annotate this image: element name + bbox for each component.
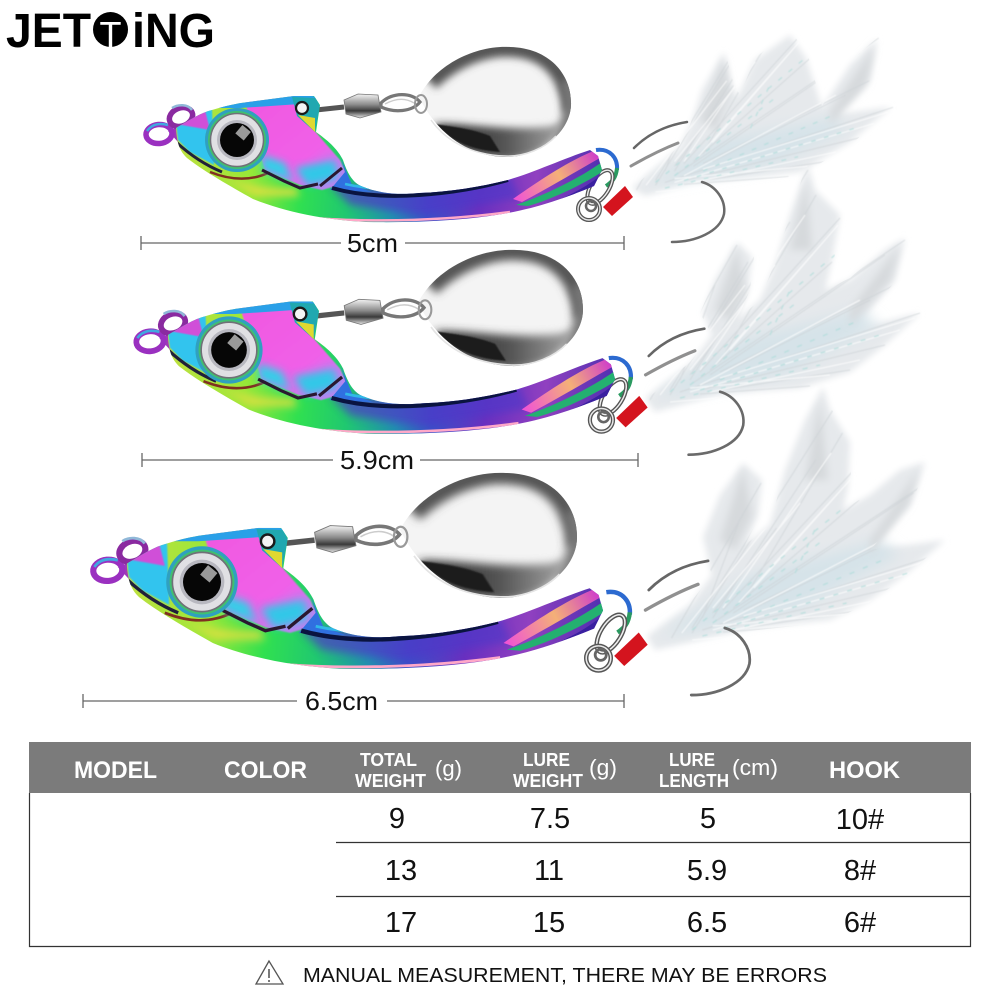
lure 1 hooks and rings bbox=[578, 122, 724, 242]
table header: COLOR bbox=[224, 757, 307, 784]
lure 3 spoon blade bbox=[400, 473, 578, 601]
table header: MODEL bbox=[74, 757, 157, 784]
table values: 15 bbox=[533, 907, 565, 939]
logo: JETOiNG: JET bbox=[6, 5, 91, 58]
table values: 6.5 bbox=[687, 907, 727, 939]
table header: (cm) bbox=[732, 755, 778, 780]
table values: 13 bbox=[385, 855, 417, 887]
measurement note: MANUAL MEASUREMENT, THERE MAY BE ERRORS bbox=[303, 965, 827, 987]
table values: 6# bbox=[844, 907, 876, 939]
table values: 7.5 bbox=[530, 803, 570, 835]
dimension: 5.9cm bbox=[142, 445, 638, 475]
logo: JETOiNG: iNG bbox=[132, 5, 215, 58]
lure 2: 5.9cm spinner lure bbox=[135, 165, 920, 475]
table values: 17 bbox=[385, 907, 417, 939]
logo: JETOiNG bbox=[6, 5, 215, 58]
dimension: 5.9cm: 5.9cm bbox=[340, 445, 414, 475]
table frame and rows bbox=[30, 793, 970, 946]
lure 1 iridescent body with swivel bbox=[145, 90, 605, 230]
lure 2 eye bbox=[195, 316, 263, 384]
table values: 5 bbox=[700, 803, 716, 835]
lure 3: 6.5cm spinner lure bbox=[83, 387, 950, 716]
table header: LURE bbox=[669, 750, 715, 770]
table values: 10# bbox=[836, 804, 884, 836]
table header: (g) bbox=[435, 756, 462, 781]
lure 3 hooks and rings bbox=[586, 561, 750, 695]
lure 1 eye bbox=[205, 108, 269, 172]
table values: 9 bbox=[389, 803, 405, 835]
lure 2 feather bbox=[645, 165, 920, 412]
table header: TOTAL bbox=[360, 750, 417, 770]
lure 3 feather bbox=[647, 387, 950, 650]
table values: 8# bbox=[844, 855, 876, 887]
specification table bbox=[29, 742, 971, 946]
lure 2 iridescent body with swivel bbox=[135, 295, 618, 442]
lure 2 hooks and rings bbox=[590, 329, 743, 455]
table values: 11 bbox=[534, 855, 564, 887]
lure 1 spoon blade bbox=[419, 47, 572, 160]
table header: WEIGHT bbox=[513, 771, 583, 791]
lure 1 feather bbox=[634, 36, 893, 196]
table header: LURE bbox=[523, 750, 570, 770]
lure 2 spoon blade bbox=[418, 250, 584, 369]
dimension: 6.5cm bbox=[83, 686, 624, 716]
table header: (g) bbox=[589, 755, 617, 780]
dimension: 6.5cm: 6.5cm bbox=[305, 686, 378, 716]
table header bbox=[29, 742, 971, 793]
table header: WEIGHT bbox=[355, 771, 426, 791]
dimension: 5cm bbox=[141, 228, 624, 258]
icon: warning triangle bbox=[256, 961, 283, 984]
logo: JETOiNG: T bbox=[100, 14, 122, 55]
table header: HOOK bbox=[829, 757, 901, 784]
lure 3 iridescent body with swivel bbox=[92, 521, 606, 678]
dimension: 5cm: 5cm bbox=[347, 228, 398, 258]
table values: 5.9 bbox=[687, 855, 727, 887]
table values bbox=[385, 803, 884, 939]
lure 1: 5cm spinner lure bbox=[140, 36, 893, 252]
table header: LENGTH bbox=[659, 771, 729, 791]
lure 3 eye bbox=[166, 546, 238, 618]
